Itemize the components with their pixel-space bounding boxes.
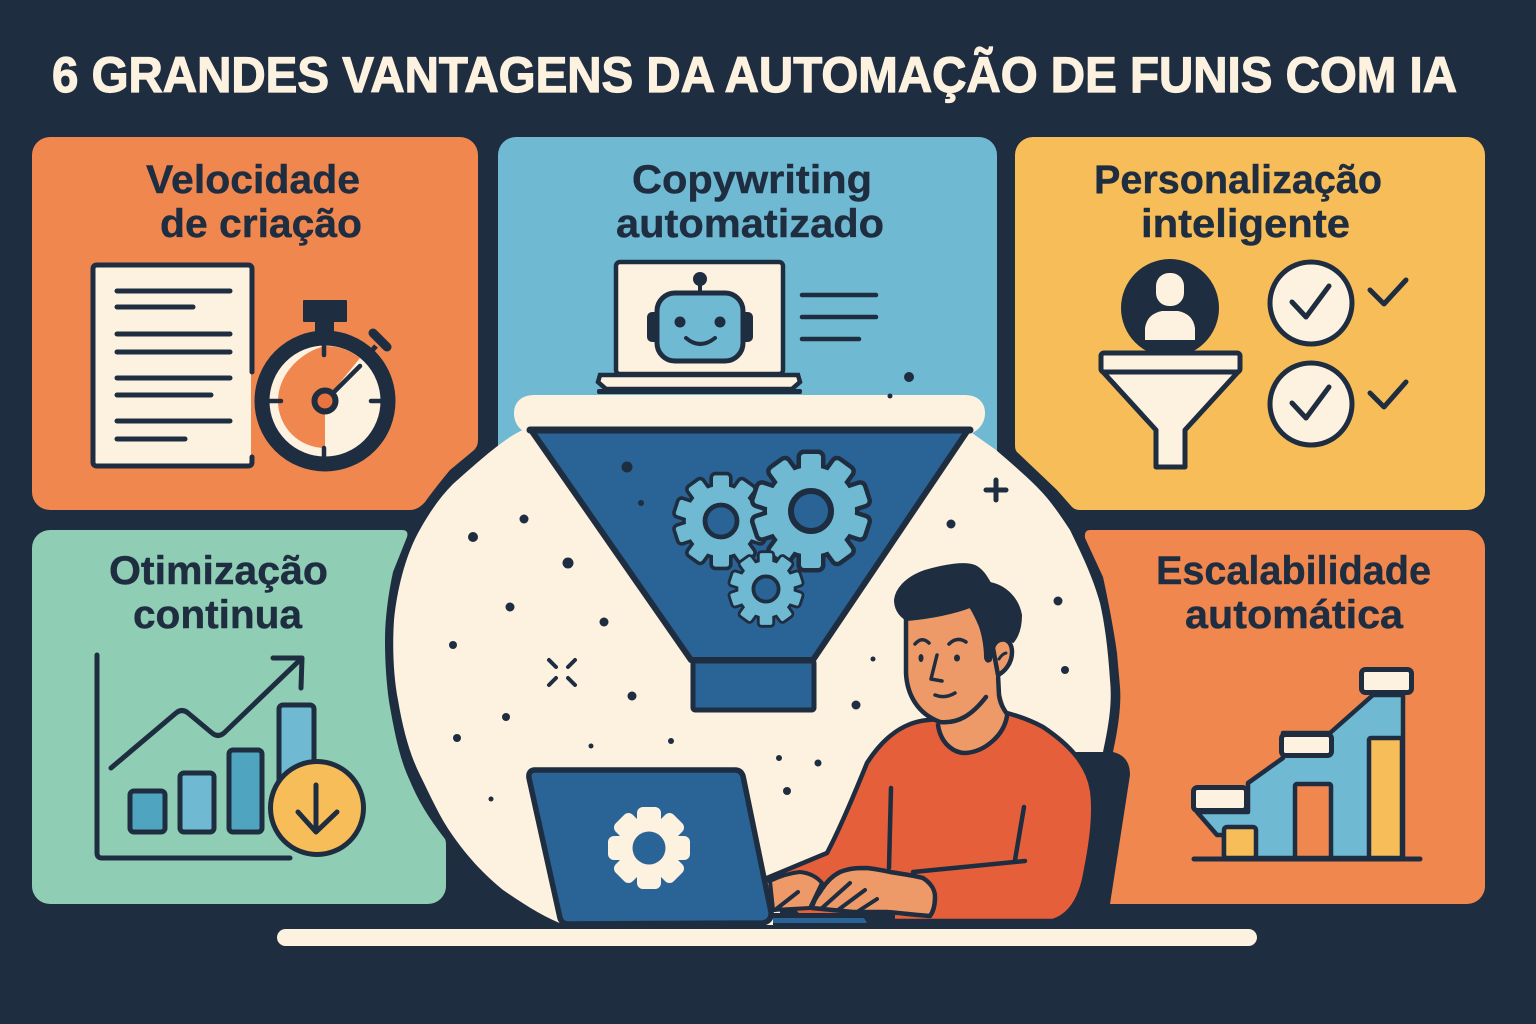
heading: Otimização [109, 549, 328, 593]
panel content: velocidade de criação [93, 158, 388, 466]
title: 6 GRANDES VANTAGENS DA AUTOMAÇÃO DE FUNIS COM IA [52, 47, 1457, 103]
icon: text lines [802, 295, 876, 339]
heading: automatizado [616, 202, 884, 246]
hair [895, 564, 1021, 662]
icon: stopwatch [262, 300, 388, 464]
face [906, 605, 1002, 722]
gear: medium [675, 475, 767, 567]
chart: bars and growth line [97, 655, 314, 858]
ear [993, 639, 1012, 675]
icon: laptop with robot [597, 262, 802, 394]
heading: continua [133, 593, 303, 637]
heading: automática [1185, 593, 1404, 637]
heading [616, 158, 884, 246]
neck [938, 670, 1007, 753]
chart: staircase bars [1194, 670, 1420, 859]
panel content: personalização inteligente [1094, 158, 1406, 467]
panel background: otimização contínua [32, 530, 446, 904]
heading: inteligente [1141, 202, 1350, 246]
panel content: otimização contínua [97, 549, 364, 858]
dark keyboard shadow [773, 913, 895, 925]
icon: laptop gear [608, 807, 690, 889]
facial features [915, 639, 966, 697]
chair [1060, 752, 1130, 930]
floor bar [277, 929, 1257, 946]
panel content: escalabilidade automática [1156, 549, 1431, 859]
funnel top rim [514, 395, 985, 434]
icon: down arrow badge [270, 762, 364, 854]
bottom dark strip [540, 925, 1140, 931]
panel background: escalabilidade automática [1085, 530, 1485, 904]
right hand and forearm [812, 868, 935, 916]
panel background: personalização inteligente [1015, 137, 1485, 510]
sweater creases [889, 788, 1025, 872]
heading: Personalização [1094, 158, 1382, 202]
icon: funnel [1101, 353, 1240, 467]
left hand [770, 872, 822, 910]
heading: de criação [160, 202, 362, 246]
foreground laptop [529, 770, 771, 924]
heading: Escalabilidade [1156, 549, 1431, 593]
heading [146, 158, 362, 246]
central funnel with gears [530, 430, 970, 710]
panel background: copywriting automatizado [498, 137, 997, 452]
heading: Copywriting [632, 158, 872, 202]
central cream circle [393, 429, 1111, 926]
heading [109, 549, 328, 637]
heading [1156, 549, 1431, 637]
neck line [998, 675, 1007, 714]
sweater [767, 713, 1093, 921]
person working on a laptop [767, 564, 1093, 925]
heading [1094, 158, 1382, 246]
icon: user avatar [1121, 259, 1219, 357]
decorative dots and sparkles [449, 372, 1069, 802]
keyboard base [773, 918, 867, 923]
collar [938, 716, 1007, 753]
icon: check circles [1270, 262, 1406, 445]
gear: small [730, 553, 802, 625]
panel content: copywriting automatizado [597, 158, 884, 394]
heading: Velocidade [146, 158, 360, 202]
gear: large [754, 454, 868, 568]
panel background: velocidade de criação [32, 137, 478, 510]
jaw line [906, 618, 986, 722]
icon: document [93, 265, 252, 466]
